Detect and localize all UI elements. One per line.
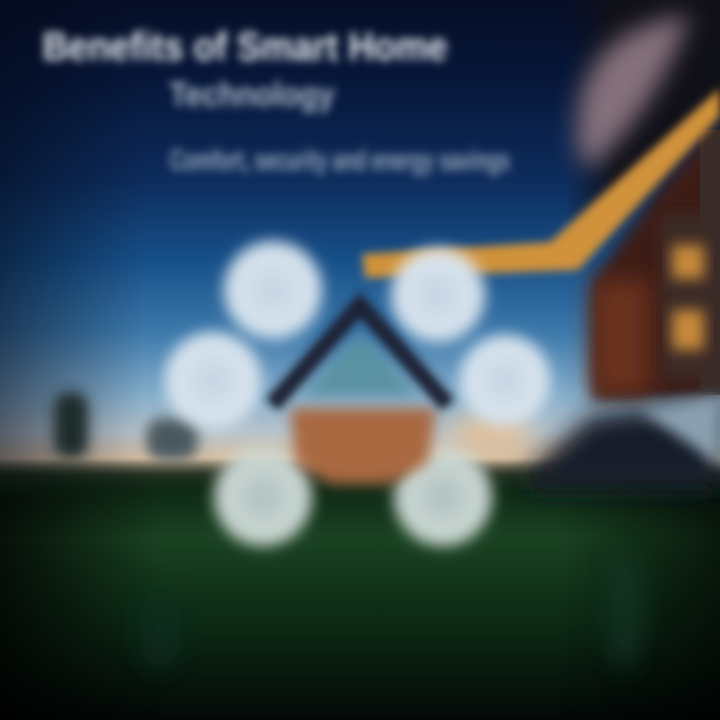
distant tree line [54, 392, 198, 460]
lit windows [672, 245, 704, 350]
circle: middle left [164, 331, 262, 429]
central house icon [272, 305, 448, 484]
title [42, 25, 448, 114]
title: Benefits of Smart Home [42, 25, 448, 69]
orange roof beam [362, 88, 720, 278]
circle: top left [223, 240, 323, 340]
subtitle: Comfort, security and energy savings [170, 144, 510, 177]
house on the right [362, 0, 720, 490]
dark window column [662, 215, 720, 380]
circle: middle right [459, 334, 551, 426]
steps [530, 400, 720, 490]
glass gable [302, 335, 418, 395]
dark upper background [565, 0, 720, 255]
wooden wall [592, 120, 720, 400]
roof feather shape [577, 15, 690, 170]
roof outline [272, 305, 448, 405]
title: Technology [170, 76, 335, 114]
circle: bottom right [393, 447, 493, 547]
circle: top right [390, 247, 486, 343]
wood base [290, 408, 436, 484]
circle: bottom left [213, 447, 313, 547]
grass field [0, 460, 720, 720]
horizon glow [450, 414, 530, 450]
